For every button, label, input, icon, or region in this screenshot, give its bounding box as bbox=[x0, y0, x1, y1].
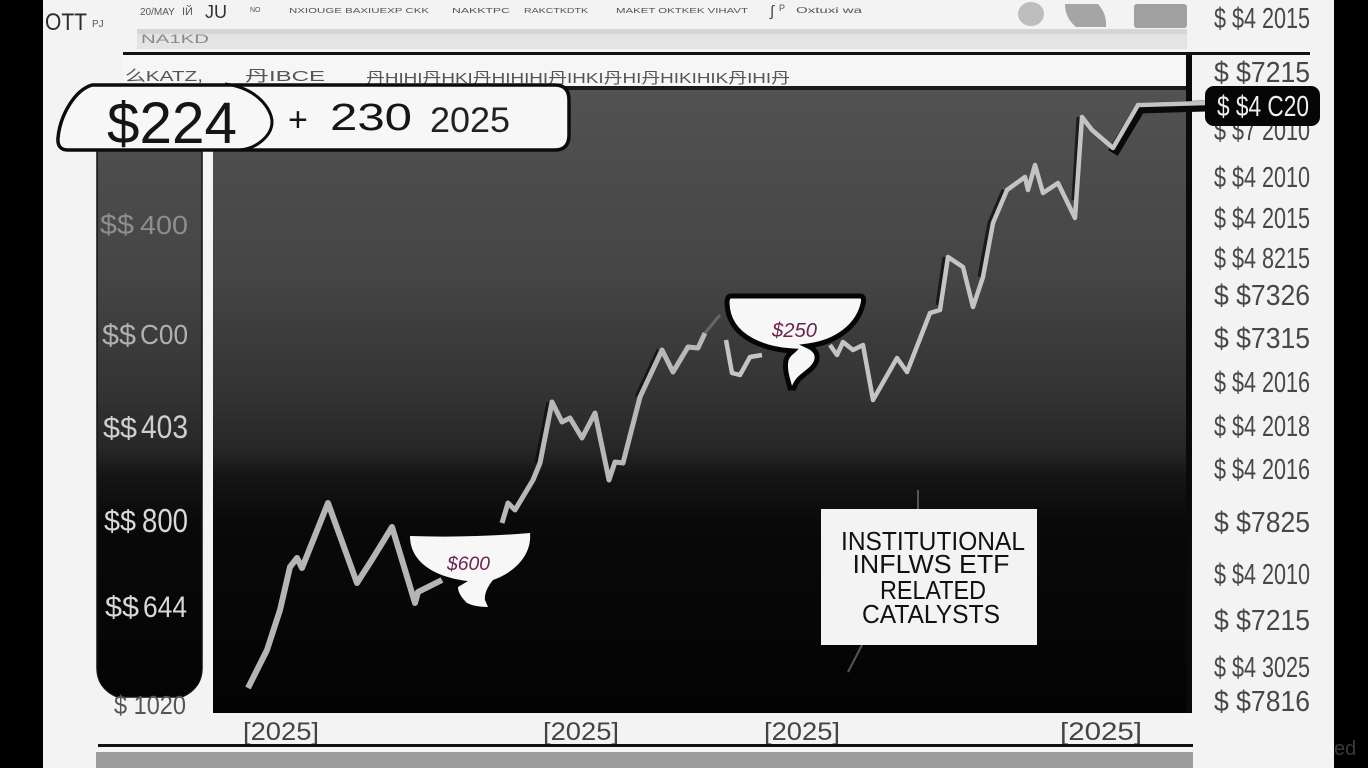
left axis labels: 400 bbox=[140, 210, 188, 240]
headline value: $224 bbox=[107, 91, 237, 156]
header navigation text bbox=[140, 2, 863, 22]
header navigation text: RAKCTKDTK bbox=[524, 6, 588, 15]
callout: $600: $600 bbox=[446, 554, 490, 575]
left axis labels: $$ bbox=[103, 412, 137, 445]
header navigation text: MAKET OKTKEK VIHAVT bbox=[616, 6, 749, 15]
headline change: + bbox=[288, 101, 308, 139]
annotation box: institutional inflows bbox=[821, 490, 1037, 672]
header navigation text: NO bbox=[250, 7, 261, 14]
headline price pill bbox=[58, 84, 569, 156]
current price tag: $ $4 C20 bbox=[1217, 91, 1309, 123]
right price axis labels: $ $4 2010 bbox=[1214, 162, 1310, 194]
main chart panel bbox=[213, 55, 1192, 713]
left price axis panel bbox=[97, 150, 202, 720]
bottom x axis labels: [2025] bbox=[764, 718, 840, 746]
header navigation text: Oxtuxi wa bbox=[796, 6, 863, 15]
header buttons bbox=[1018, 2, 1187, 28]
bottom x axis labels: [2025] bbox=[1060, 718, 1142, 746]
sub header band: NA1KD bbox=[141, 32, 210, 46]
right price axis labels: $ $7326 bbox=[1214, 280, 1310, 312]
callout: $250 bbox=[727, 296, 864, 388]
right price axis labels: $ $4 2010 bbox=[1214, 559, 1310, 591]
bottom x axis labels bbox=[243, 718, 1142, 746]
bottom x axis labels: [2025] bbox=[543, 718, 619, 746]
left axis labels: $$ bbox=[104, 505, 136, 538]
header navigation text: ∫ bbox=[769, 3, 776, 20]
right price axis labels: $ $4 2015 bbox=[1214, 203, 1310, 235]
left axis labels: 800 bbox=[142, 502, 188, 539]
column heading strip: 丹HIHI丹HKI丹HIHIHI丹IHKI丹HI丹HIKIHIK丹IHI丹 bbox=[366, 70, 790, 87]
header navigation text: IЙ bbox=[182, 5, 193, 18]
left axis labels: $$ bbox=[105, 591, 139, 624]
left axis labels: C00 bbox=[140, 319, 188, 350]
right price axis labels: $ $4 2016 bbox=[1214, 454, 1310, 486]
right price axis labels: $ $4 3025 bbox=[1214, 652, 1310, 684]
right price axis labels bbox=[1214, 3, 1310, 718]
right price axis labels: $ $7215 bbox=[1214, 57, 1310, 89]
bottom x axis labels: [2025] bbox=[243, 718, 319, 746]
header navigation text: NXIOUGE BAXIUEXP CKK bbox=[289, 6, 429, 15]
line shadow near the peak bbox=[1113, 106, 1206, 153]
bottom rule bbox=[98, 744, 1193, 747]
header navigation text: 20/MAY bbox=[140, 7, 175, 18]
left axis labels: 403 bbox=[141, 409, 188, 445]
headline price pill: 230 bbox=[330, 97, 412, 139]
left axis labels: 644 bbox=[143, 591, 187, 624]
left axis labels: $$ bbox=[102, 319, 136, 352]
column heading strip: 丹IBCE bbox=[245, 68, 325, 85]
left axis labels bbox=[100, 209, 188, 624]
current price tag bbox=[1205, 86, 1320, 126]
header bar bbox=[45, 2, 1187, 36]
annotation box: institutional inflows: INFLWS ETF bbox=[852, 549, 1010, 579]
annotation box: institutional inflows: CATALYSTS bbox=[862, 599, 1000, 629]
left axis labels: $$ bbox=[100, 209, 134, 240]
white axis separator bbox=[203, 150, 212, 713]
right price axis labels: $ $4 2015 bbox=[1214, 3, 1310, 35]
price line bbox=[248, 103, 1206, 688]
right price axis labels: $ $4 2018 bbox=[1214, 411, 1310, 443]
header navigation text: NAKKTPC bbox=[452, 6, 511, 15]
watermark fragment: ed bbox=[1334, 738, 1356, 760]
right price axis labels: $ $7816 bbox=[1214, 686, 1310, 718]
header navigation text: JU bbox=[205, 2, 227, 22]
bottom grey bar bbox=[96, 752, 1193, 768]
right price axis labels: $ $7315 bbox=[1214, 323, 1310, 355]
right price axis labels: $ $7825 bbox=[1214, 507, 1310, 539]
callout: $250: $250 bbox=[771, 320, 817, 342]
headline price pill: 2025 bbox=[430, 101, 510, 140]
header bar: PJ bbox=[92, 19, 104, 30]
annotation box: institutional inflows: INSTITUTIONAL bbox=[841, 526, 1025, 556]
column heading strip bbox=[123, 55, 1185, 89]
column heading strip: 么KATZ, bbox=[125, 68, 203, 85]
callout: $600 bbox=[410, 533, 530, 607]
header navigation text: P bbox=[779, 3, 785, 13]
logo text: OTT bbox=[45, 9, 87, 36]
bottom left axis label: $ 1020 bbox=[114, 690, 186, 720]
right price axis labels: $ $4 2016 bbox=[1214, 367, 1310, 399]
right price axis labels: $ $7215 bbox=[1214, 605, 1310, 637]
right price axis labels: $ $7 2010 bbox=[1214, 115, 1310, 147]
sub header band bbox=[137, 29, 1187, 49]
annotation box: institutional inflows: RELATED bbox=[880, 575, 986, 605]
right price axis labels: $ $4 8215 bbox=[1214, 243, 1310, 275]
